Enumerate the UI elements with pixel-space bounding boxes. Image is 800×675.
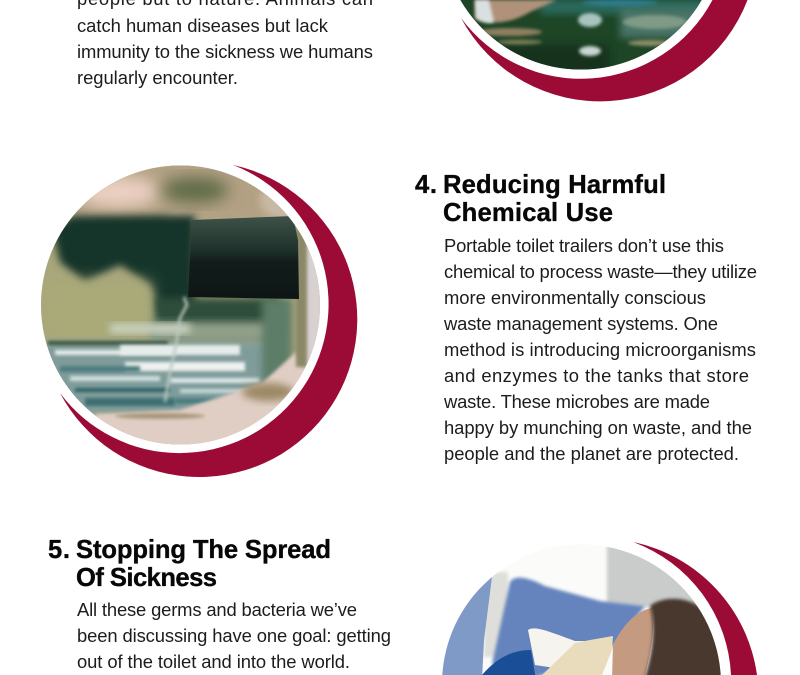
section 3 body text — [77, 0, 373, 88]
section 5 body text — [77, 599, 391, 672]
section 5 heading: Of Sickness — [76, 564, 217, 592]
section 4 heading: Chemical Use — [443, 199, 613, 227]
section 4 text — [415, 171, 757, 464]
water stream — [165, 297, 187, 402]
section 3 image: duck on pond with crescent — [440, 0, 748, 101]
section 5 text — [48, 536, 391, 672]
section 4 body text: waste. These microbes are made — [443, 391, 710, 412]
photo: woman blowing nose on sofa — [440, 540, 725, 675]
section 5 heading — [48, 536, 331, 592]
section 3 body text: catch human diseases but lack — [77, 15, 329, 36]
section 5 body text: out of the toilet and into the world. — [77, 651, 350, 672]
pipe — [188, 216, 299, 299]
section 3 body text: immunity to the sickness we humans — [77, 41, 373, 62]
section 4 body text: more environmentally conscious — [444, 287, 706, 308]
section 4 heading: Reducing Harmful — [443, 171, 666, 199]
section 4 body text: chemical to process waste—they utilize — [444, 261, 757, 282]
section 4 body text: and enzymes to the tanks that store — [444, 365, 749, 386]
photo: pipe pouring into water — [40, 160, 328, 450]
section 5 heading: 5. — [48, 536, 70, 564]
section 4 body text: happy by munching on waste, and the — [444, 417, 752, 438]
section 4 body text: Portable toilet trailers don’t use this — [444, 235, 724, 256]
photo: duck on pond — [460, 0, 702, 70]
section 4 heading — [415, 171, 666, 227]
section 4 body text: people and the planet are protected. — [444, 443, 739, 464]
section 5 body text: been discussing have one goal: getting — [77, 625, 391, 646]
section 4 image: drainage pipe with crescent — [40, 160, 357, 477]
maroon crescent arc — [60, 165, 357, 477]
section 5 image: sick woman with crescent — [440, 540, 757, 675]
section 3 body text: regularly encounter. — [77, 67, 238, 88]
maroon crescent arc — [461, 0, 748, 101]
section 4 heading: 4. — [415, 171, 437, 199]
section 4 body text: waste management systems. One — [443, 313, 718, 334]
section 5 body text: All these germs and bacteria we’ve — [77, 599, 357, 620]
section 5 heading: Stopping The Spread — [76, 536, 331, 564]
section 4 body text: method is introducing microorganisms — [444, 339, 756, 360]
section 4 body text — [443, 235, 757, 464]
maroon crescent arc — [633, 542, 757, 675]
